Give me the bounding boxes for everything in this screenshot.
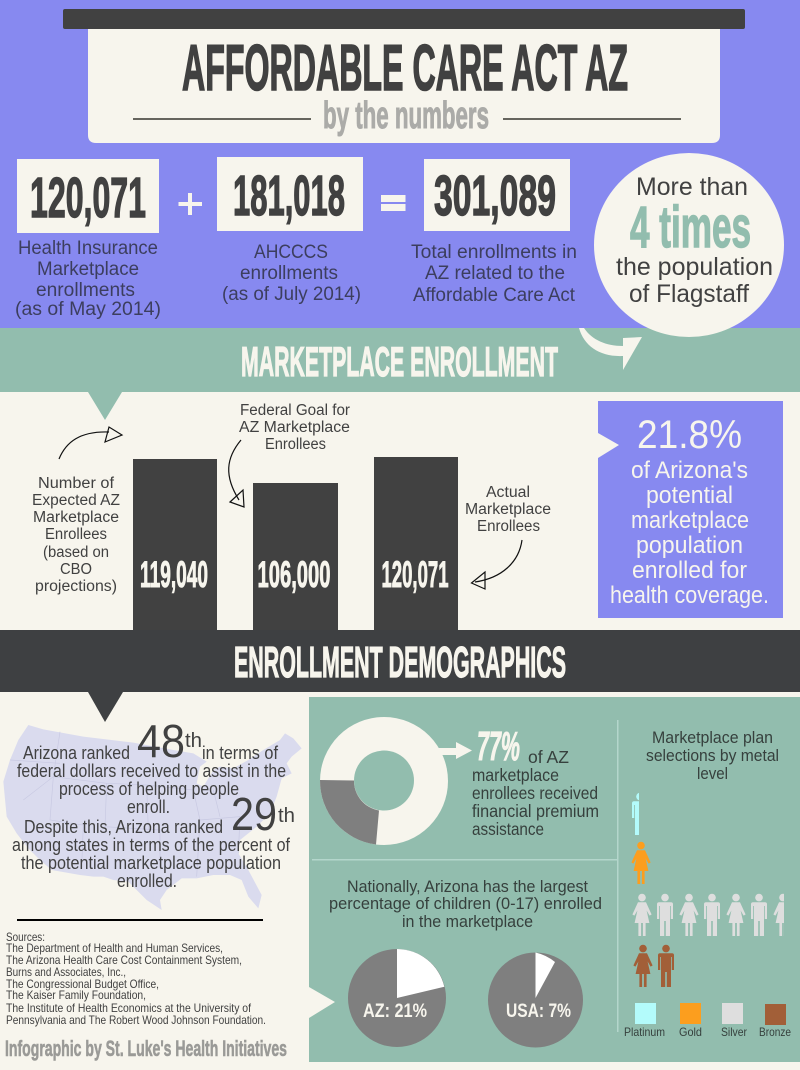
subtitle rule left [133,118,311,120]
description: assistance [472,819,544,839]
background: purple header area [0,0,800,328]
band [0,630,800,692]
banner top bar [63,9,745,29]
sources: The Institute of Health Economics at the University of [6,1001,252,1015]
panel pointer [309,987,335,1018]
rank suffix: th [278,805,295,827]
label: actual enrollees: Marketplace [465,501,551,518]
donut slice [320,780,379,844]
line 4: enroll. [127,797,170,817]
label: federal goal: Federal Goal for [240,402,350,419]
line 3: process of helping people [59,779,239,799]
description [472,747,599,839]
legend silver: Silver [721,1025,747,1039]
sources: Pennsylvania and The Robert Wood Johnson Foundation. [6,1013,266,1027]
bar: actual: 120,071 [382,554,448,595]
pie chart: AZ 21 percent: AZ: 21% [363,1001,427,1022]
band pointer [88,392,122,420]
description: financial premium [472,801,599,821]
label: expected enrollees: Enrollees [45,526,107,543]
caption: enrollments [36,280,135,301]
legend bronze [759,1004,791,1039]
text block: children enrolled: in the marketplace [402,912,533,931]
text block: children enrolled [329,877,602,931]
stat: AHCCCS enrollments [217,157,363,305]
label: expected enrollees: (based on [43,544,109,561]
donut chart: 77 percent [320,717,448,845]
donut base [320,717,448,845]
description [610,457,769,609]
line 1: Arizona ranked [23,743,130,763]
caption: (as of July 2014) [222,284,361,305]
description: of AZ [528,747,569,767]
arrow: actual label to bar [472,540,522,589]
description: population [636,532,743,559]
heading: plan selections [646,728,779,783]
label: expected enrollees: CBO [60,561,92,578]
bar: actual [374,457,458,630]
legend: metal levels [624,1003,791,1039]
title banner [63,9,745,143]
label: expected enrollees: projections) [35,578,117,595]
number box [424,159,570,231]
rank 48: 48 [137,715,185,767]
caption: Affordable Care Act [413,285,576,306]
pictogram: platinum [632,793,639,835]
label: federal goal: AZ Marketplace [239,419,350,436]
number: 301,089 [434,164,556,228]
heading: plan selections: level [697,764,728,783]
caption [222,242,361,305]
bar: federal goal: 106,000 [258,554,330,595]
pie chart: USA 7 percent [488,952,583,1048]
band [0,328,800,392]
arrow: federal goal label to bar [229,440,244,507]
line 2: federal dollars received to assist in the [17,761,286,781]
banner card [88,29,720,143]
line 1 end: in terms of [202,743,279,763]
subtitle rule right [503,118,681,120]
rank suffix: th [185,730,202,752]
pie chart: USA 7 percent: USA: 7% [506,1001,571,1022]
label: expected enrollees: Expected AZ [32,492,120,509]
callout panel: 21.8 percent [598,401,783,618]
caption [411,242,577,306]
description: of Arizona's [631,457,748,484]
line 5: Despite this, Arizona ranked [24,817,223,837]
bar: expected [133,459,217,630]
heading: plan selections: selections by metal [646,746,779,765]
panel background [309,697,800,1062]
label: federal goal: Enrollees [265,436,326,453]
text block: children enrolled: percentage of children (0-17) enrolled [329,894,602,913]
legend gold: Gold [679,1025,702,1039]
legend silver [721,1003,747,1039]
panel shape [598,401,783,618]
bar: federal goal [253,483,338,630]
bar: expected: 119,040 [140,554,208,595]
pictogram: silver [632,894,793,936]
heading: plan selections: Marketplace plan [652,728,773,747]
pictogram: gold [631,842,651,884]
caption: Health Insurance [18,238,158,259]
percentage: 21.8% [637,413,742,457]
sources: The Arizona Health Care Cost Containment System, [6,953,242,967]
legend gold [679,1003,702,1039]
credit line: Infographic by St. Luke's Health Initiatives [5,1036,287,1061]
callout text: More than [636,173,748,201]
section band: marketplace enrollment [0,328,800,420]
number box [17,159,159,233]
donut hole [354,750,414,810]
number: 120,071 [30,166,146,230]
line 6: among states in terms of the percent of [12,835,291,855]
panel: demographics [309,697,800,1062]
label: expected enrollees: Number of [38,475,115,492]
description: potential [646,482,733,509]
caption: AHCCCS [254,242,328,263]
subtitle: by the numbers [323,95,489,137]
plus sign [178,193,202,215]
pie chart: AZ 21 percent [348,949,446,1047]
legend bronze: Bronze [759,1025,791,1039]
stat: total enrollments [411,159,577,306]
sources: Burns and Associates, Inc., [6,965,126,979]
sources: The Congressional Budget Office, [6,977,159,991]
caption: AZ related to the [425,263,565,284]
percentage: 77% [477,723,520,769]
legend platinum [624,1003,665,1039]
caption [15,238,161,320]
callout text: the population [616,253,773,281]
label: expected enrollees: Marketplace [33,509,119,526]
section band: enrollment demographics [0,630,800,722]
pictogram: bronze [633,945,674,987]
map: United States [3,725,302,910]
description: enrollees received [472,783,598,803]
sources [6,930,266,1027]
caption: Total enrollments in [411,242,577,263]
label: actual enrollees [465,484,551,535]
line 7: the potential marketplace population [21,853,281,873]
label: expected enrollees [32,475,120,595]
label: federal goal [239,402,350,453]
rank 29: 29 [231,788,277,840]
description: health coverage. [610,582,769,609]
label: actual enrollees: Actual [486,484,530,501]
caption: (as of May 2014) [15,299,161,320]
background: cream page [0,392,800,1070]
arrow: expected label to bar [59,427,122,459]
caption: enrollments [240,263,338,284]
legend platinum: Platinum [624,1025,665,1039]
line 8: enrolled. [117,871,177,891]
stat: marketplace enrollments [15,159,161,320]
number box [217,157,363,231]
sources: Sources: [6,930,45,944]
callout circle [594,153,784,337]
description: marketplace [631,507,749,534]
bar chart: marketplace enrollees [133,457,458,630]
arrow: from enrollment to Flagstaff callout [579,328,642,370]
stat: 77 percent premium assistance [472,723,599,839]
label: actual enrollees: Enrollees [477,518,540,535]
divider vertical [617,720,618,1032]
divider horizontal [312,859,618,860]
divider rule above sources [17,919,263,921]
callout: Flagstaff comparison [594,153,784,337]
caption: Marketplace [37,259,139,280]
text block: children enrolled: Nationally, Arizona has the largest [347,877,588,896]
band pointer [88,692,123,722]
number: 181,018 [233,164,345,228]
callout text: of Flagstaff [629,280,749,308]
text block: Arizona rankings [12,715,295,891]
arrow: donut to stat [438,742,472,759]
description: marketplace [472,765,559,785]
sources: The Department of Health and Human Services, [6,941,223,955]
description: enrolled for [632,557,747,584]
equals sign [381,195,406,211]
sources: The Kaiser Family Foundation, [6,988,146,1002]
